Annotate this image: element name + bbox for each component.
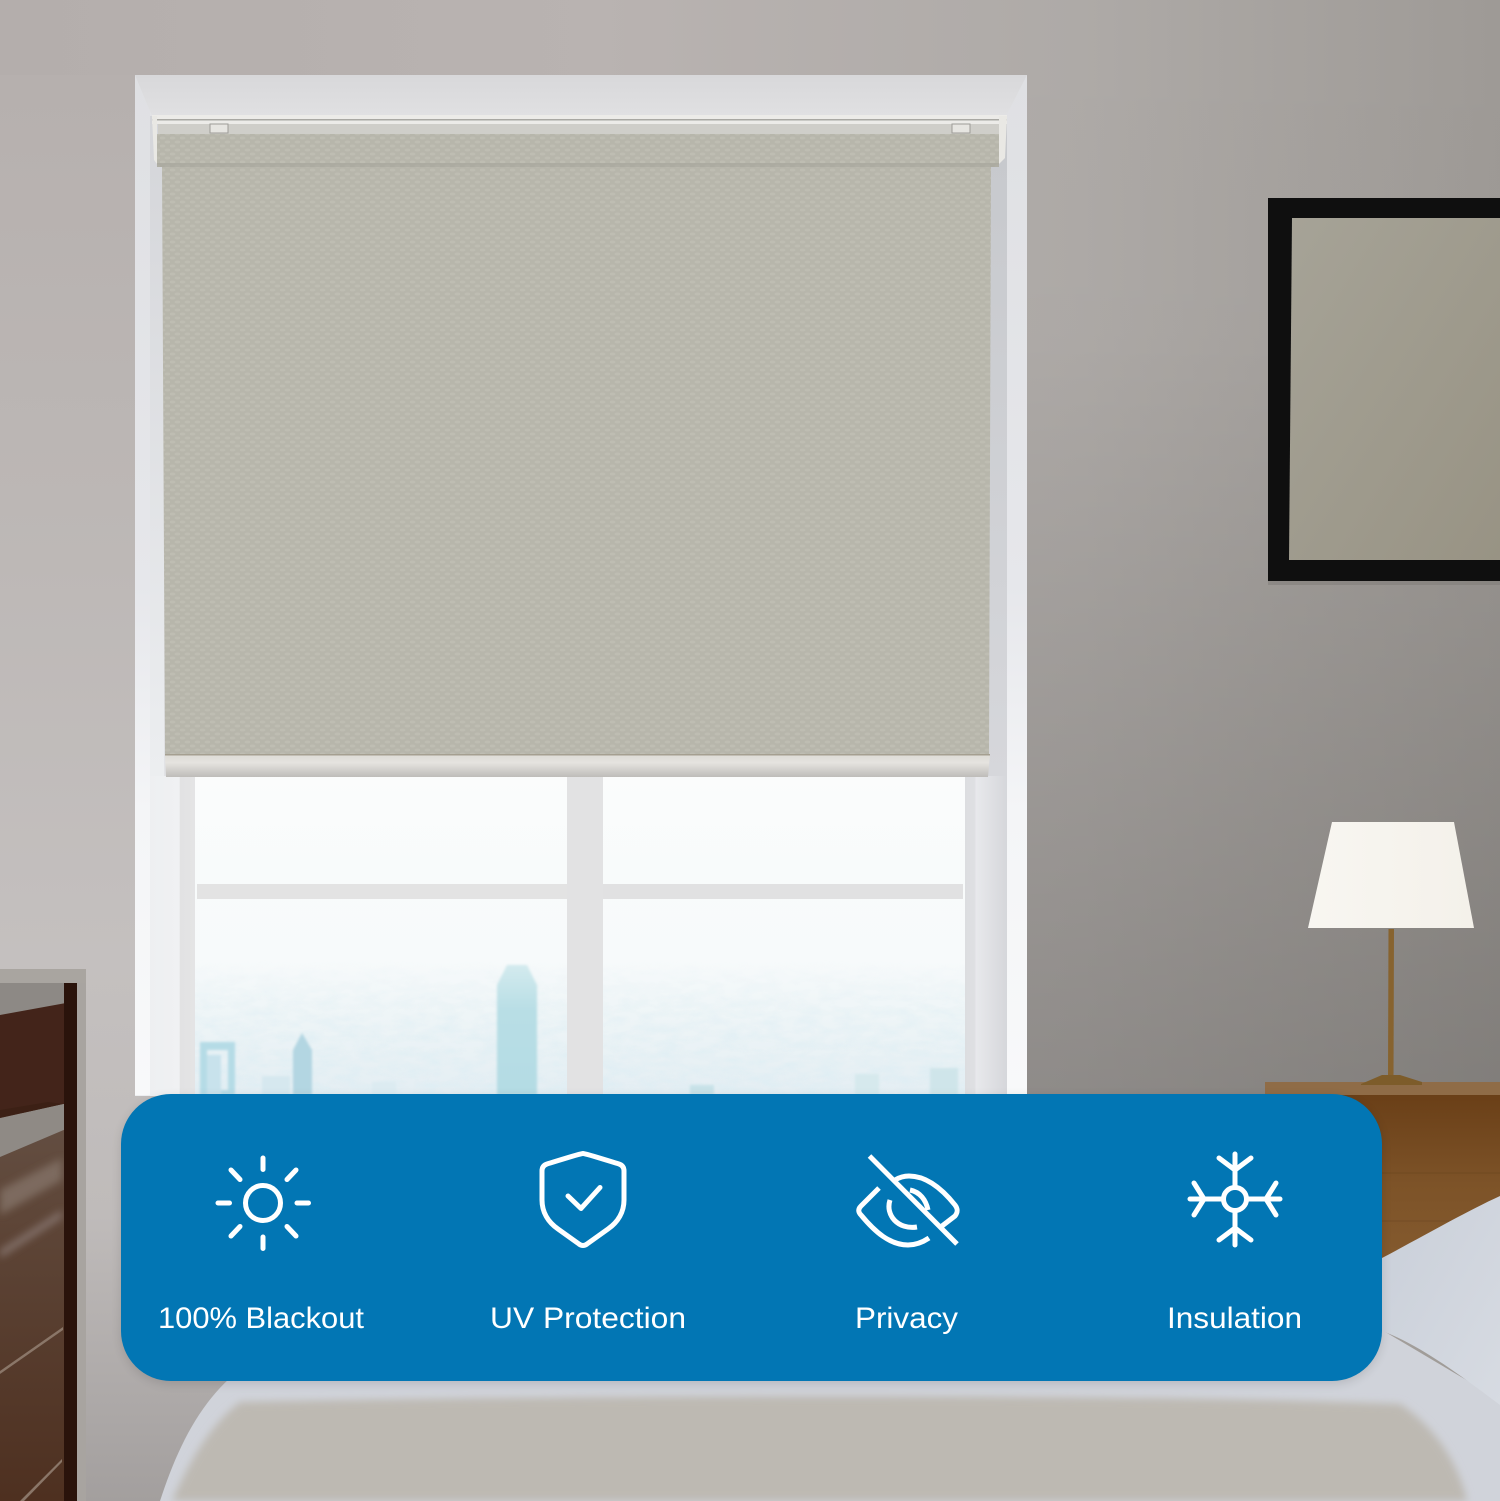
dresser <box>0 969 86 1501</box>
fabric roll <box>157 134 999 167</box>
label: 100% Blackout: 100% Blackout <box>158 1302 365 1335</box>
fabric panel <box>162 167 991 756</box>
table lamp <box>1308 822 1474 1085</box>
label: Insulation: Insulation <box>1167 1302 1302 1335</box>
icon: crossed-out eye <box>859 1156 957 1245</box>
picture frame <box>1268 198 1500 585</box>
nightstand <box>1265 1082 1500 1274</box>
feature: Privacy <box>855 1156 958 1335</box>
pillow <box>1382 1196 1500 1405</box>
feature: Insulation <box>1167 1154 1302 1335</box>
icon: sun <box>218 1158 308 1248</box>
feature: UV Protection <box>490 1154 686 1335</box>
window recess and frame <box>135 75 1027 1096</box>
headrail <box>152 115 1007 164</box>
bottom rail <box>165 754 990 777</box>
city haze <box>308 1027 736 1054</box>
window muntins <box>197 777 963 1095</box>
icon: shield with check <box>542 1154 624 1246</box>
panel shadow <box>121 1097 1382 1384</box>
window view with skyline <box>195 777 965 1095</box>
bed with pillow <box>160 1196 1500 1501</box>
label: Privacy: Privacy <box>855 1302 958 1335</box>
skyline buildings <box>200 965 958 1095</box>
feature panel <box>121 1094 1382 1381</box>
feature: 100% Blackout <box>158 1158 365 1335</box>
roller blind <box>152 115 1007 777</box>
icon: snowflake <box>1190 1154 1280 1245</box>
label: UV Protection: UV Protection <box>490 1302 686 1335</box>
